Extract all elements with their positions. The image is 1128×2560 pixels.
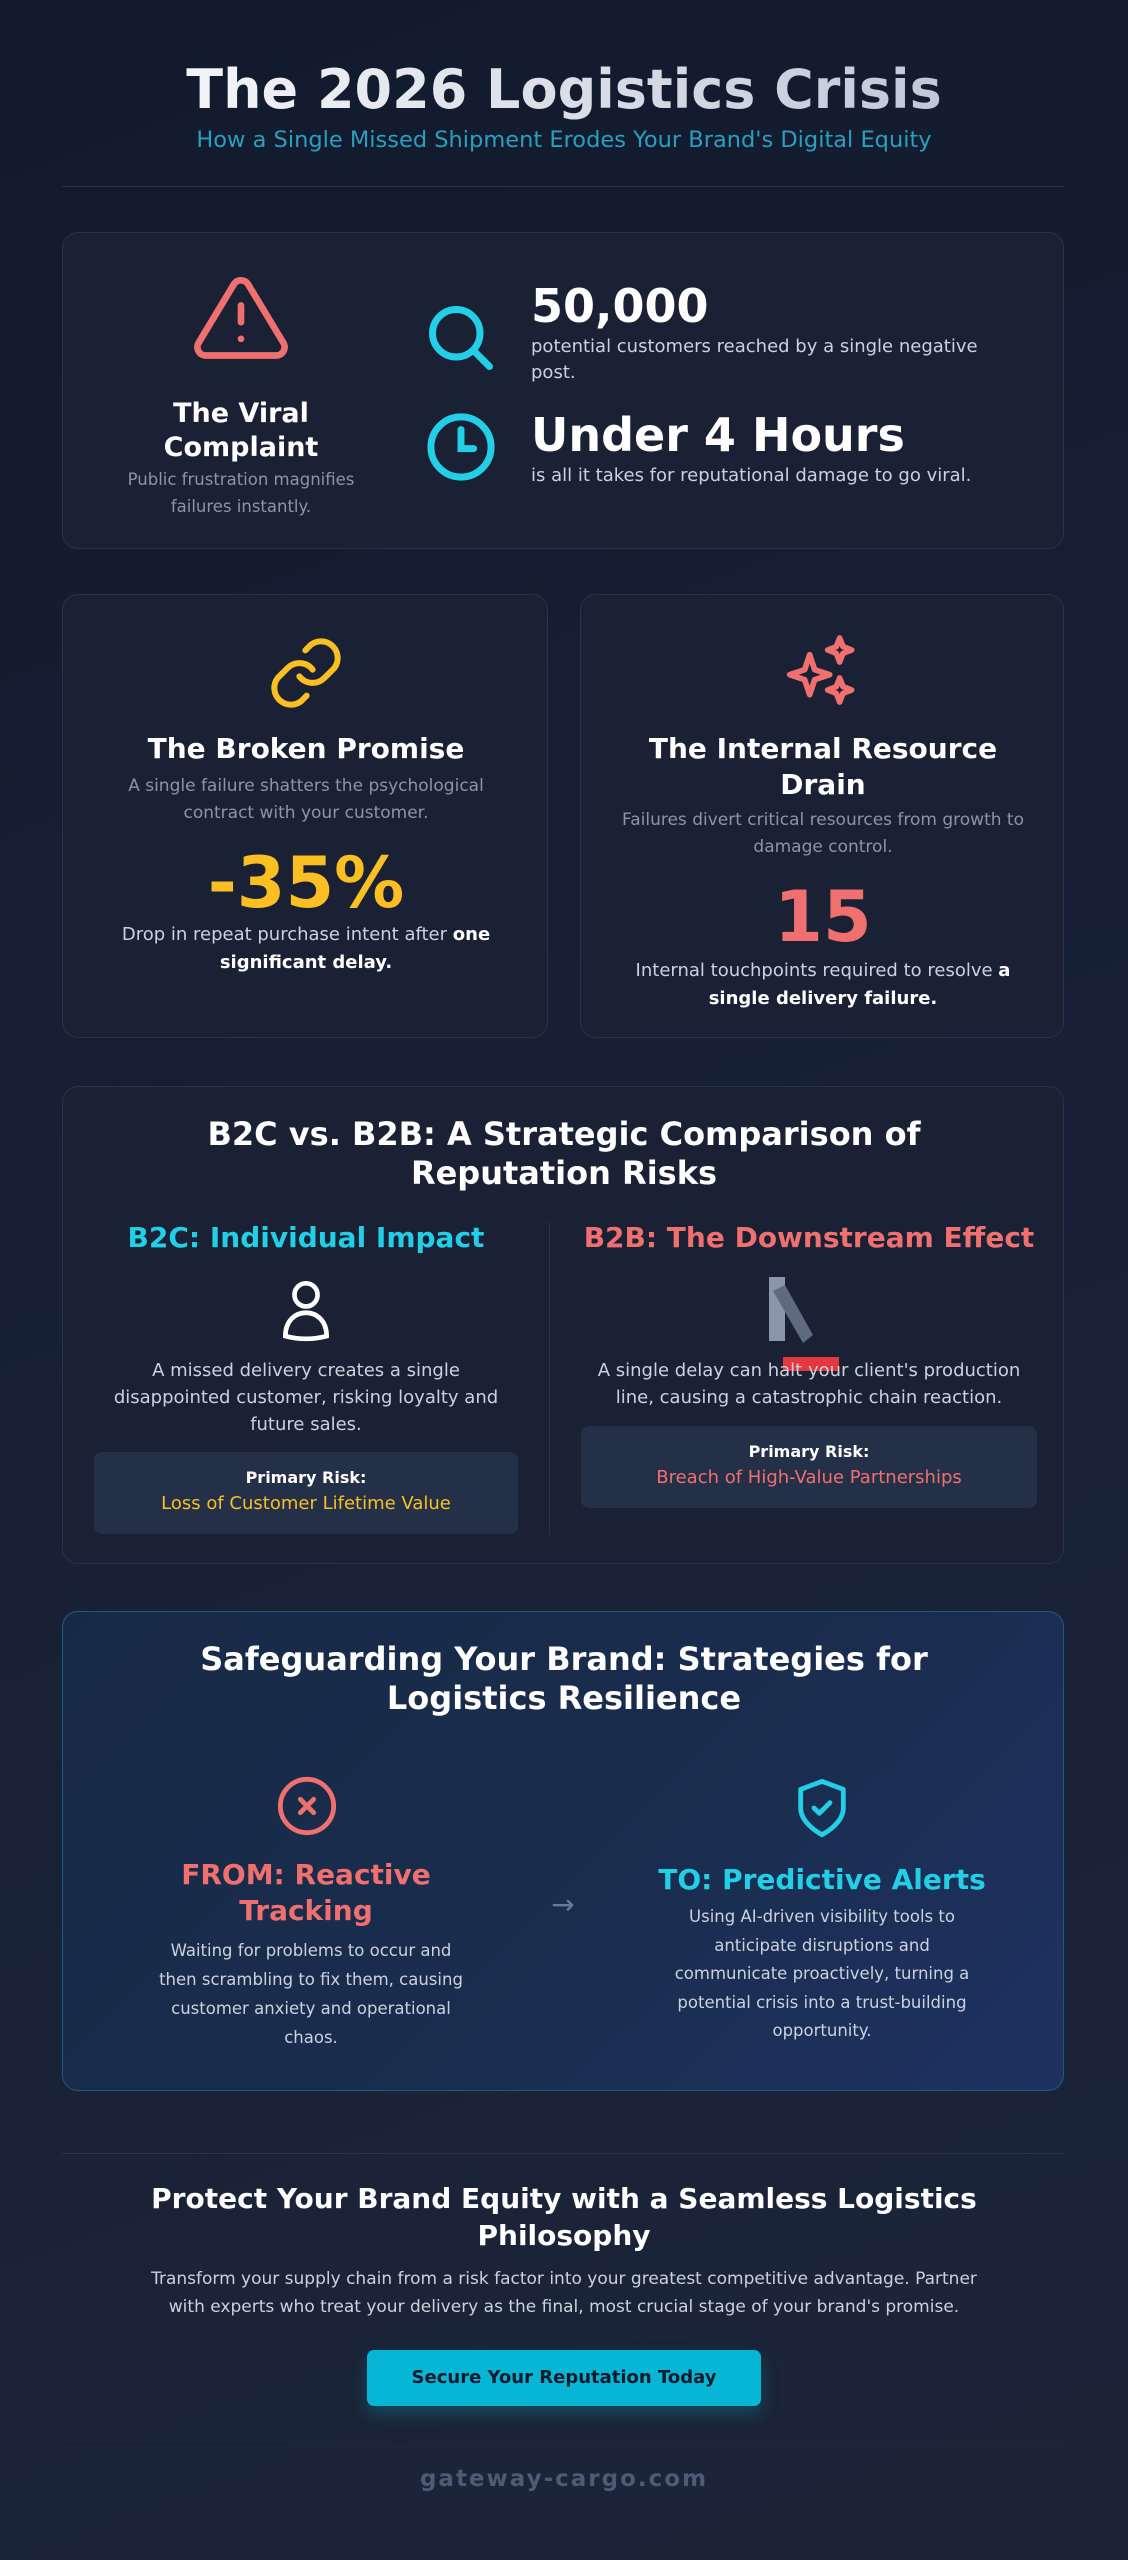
caption: Drop in repeat purchase intent after one significant delay. xyxy=(122,924,490,973)
heading: the viral complaint: The Viral Complaint xyxy=(164,398,318,463)
risk box xyxy=(94,1452,518,1534)
column: B2B: B2B: The Downstream Effect xyxy=(584,1221,1034,1254)
heading: The Internal Resource Drain xyxy=(649,732,997,801)
panel: strategies xyxy=(62,1611,1064,2091)
icon: shield check xyxy=(798,1778,846,1838)
panel: viral complaint: Under 4 Hours xyxy=(531,408,905,462)
icon: user xyxy=(283,1281,329,1342)
column: B2C: B2C: Individual Impact xyxy=(128,1221,484,1254)
stat: 15: 15 xyxy=(774,876,872,958)
icon: domino chain xyxy=(769,1277,839,1371)
subtitle: How a Single Missed Shipment Erodes Your Brand's Digital Equity xyxy=(196,127,932,153)
icon: x circle xyxy=(278,1776,336,1836)
icon: sparkles xyxy=(786,635,854,705)
title: The 2026 Logistics Crisis xyxy=(186,58,942,121)
icon: search xyxy=(429,306,493,370)
heading: B2C vs. B2B: A Strategic Comparison of Reputation Risks xyxy=(208,1115,920,1192)
text: viral description: Public frustration magnifies failures instantly. xyxy=(128,470,354,516)
column: from reactive xyxy=(159,1776,463,2047)
stat: -35%: -35% xyxy=(208,842,404,924)
heading: Safeguarding Your Brand: Strategies for Logistics Resilience xyxy=(200,1640,928,1717)
CTA heading: Protect Your Brand Equity with a Seamless Logistics Philosophy xyxy=(151,2182,977,2252)
risk box xyxy=(581,1426,1037,1508)
panel: viral complaint xyxy=(62,232,1064,549)
caption: Internal touchpoints required to resolve a single delivery failure. xyxy=(636,960,1010,1009)
column: B2B: A single delay can halt your client's production line, causing a catastrophic chain reaction. xyxy=(598,1360,1020,1408)
panel: viral complaint: 50,000 xyxy=(531,279,709,333)
panel: viral complaint: potential customers reached by a single negative post. xyxy=(531,336,978,383)
risk box: Loss of Customer Lifetime Value xyxy=(161,1493,451,1514)
icon: warning xyxy=(194,277,288,359)
column: B2C xyxy=(94,1221,518,1534)
column: from reactive: FROM: Reactive Tracking xyxy=(181,1858,431,1927)
panel: broken promise xyxy=(62,594,548,1038)
title xyxy=(0,58,1128,122)
panel: B2C vs B2B xyxy=(62,1086,1064,1564)
risk box: Breach of High-Value Partnerships xyxy=(656,1467,962,1488)
column: to predictive xyxy=(658,1778,986,2040)
column: to predictive: Using AI-driven visibility tools to anticipate disruptions and communicate proactively, turning a potential crisis into a trust-building opportunity. xyxy=(675,1907,969,2040)
arrow: → xyxy=(551,1888,575,1921)
CTA button xyxy=(367,2350,761,2406)
icon: link xyxy=(271,638,341,708)
column: from reactive: Waiting for problems to occur and then scrambling to fix them, causing customer anxiety and operational chaos. xyxy=(159,1941,463,2047)
icon: clock xyxy=(427,413,495,481)
column: B2B xyxy=(581,1221,1037,1508)
text: A single failure shatters the psychological contract with your customer. xyxy=(128,776,484,823)
column: to predictive: TO: Predictive Alerts xyxy=(658,1863,986,1896)
panel: viral complaint: is all it takes for reputational damage to go viral. xyxy=(531,465,971,486)
risk box: Primary Risk: xyxy=(749,1442,869,1461)
risk box: Primary Risk: xyxy=(246,1468,366,1487)
footer: gateway-cargo.com xyxy=(420,2466,708,2492)
panel: internal resource drain xyxy=(580,594,1064,1038)
text: Failures divert critical resources from growth to damage control. xyxy=(622,810,1024,857)
heading: The Broken Promise xyxy=(148,732,464,765)
CTA button: Secure Your Reputation Today xyxy=(412,2367,716,2388)
stat: under 4 hours xyxy=(427,408,971,486)
stat: 50,000 xyxy=(429,279,978,383)
CTA paragraph: Transform your supply chain from a risk factor into your greatest competitive advantage. Partner with experts who treat your delivery as the final, most crucial stage of your brand's promise. xyxy=(151,2269,977,2317)
column: B2C: A missed delivery creates a single disappointed customer, risking loyalty and future sales. xyxy=(114,1360,498,1435)
